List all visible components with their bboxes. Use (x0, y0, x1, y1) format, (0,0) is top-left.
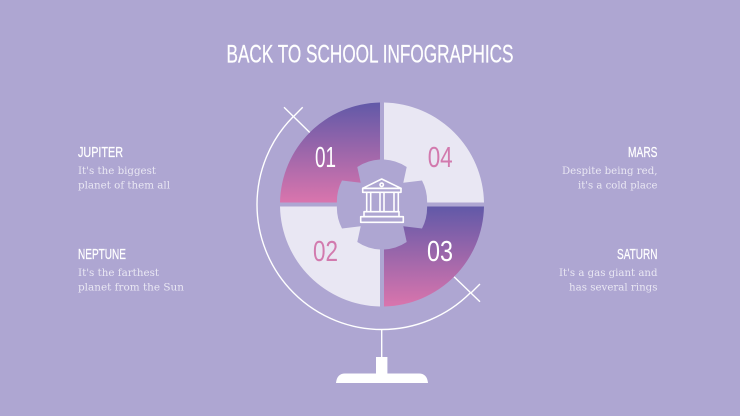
text block: Saturn: SATURN (617, 246, 658, 263)
segment 02 (280, 206, 380, 306)
segment 01 (280, 102, 380, 202)
globe stand: arc, pins, stem and base (257, 107, 480, 383)
text block: Mars: MARS (628, 144, 658, 161)
text block: Neptune: NEPTUNE (78, 246, 126, 263)
segment 01: 01 (315, 142, 336, 174)
segment 03: 03 (427, 236, 453, 268)
stem (381, 330, 383, 358)
text block: Mars (562, 144, 658, 192)
text block: Jupiter: JUPITER (78, 144, 123, 161)
text block: Neptune: planet from the Sun (78, 282, 184, 294)
segment 04: 04 (428, 142, 453, 174)
icon: school building (361, 179, 403, 222)
segment 04 (384, 102, 484, 202)
base (336, 357, 428, 383)
pin: upper left cross (284, 107, 310, 133)
text block: Neptune (78, 246, 184, 294)
segment 03 (384, 206, 484, 306)
text block: Jupiter: It's the biggest (78, 165, 157, 177)
arc (257, 116, 470, 330)
text block: Mars: Despite being red, (562, 165, 658, 177)
text block: Saturn: has several rings (569, 282, 658, 294)
pin: lower right cross (454, 277, 480, 302)
title: BACK TO SCHOOL INFOGRAPHICS (226, 40, 514, 68)
text block: Mars: it's a cold place (578, 180, 658, 192)
segment 02: 02 (313, 236, 338, 268)
text block: Saturn (559, 246, 658, 294)
text block: Jupiter: planet of them all (78, 180, 171, 192)
text block: Saturn: It's a gas giant and (559, 267, 658, 279)
text block: Jupiter (78, 144, 171, 192)
text block: Neptune: It's the farthest (78, 267, 160, 279)
